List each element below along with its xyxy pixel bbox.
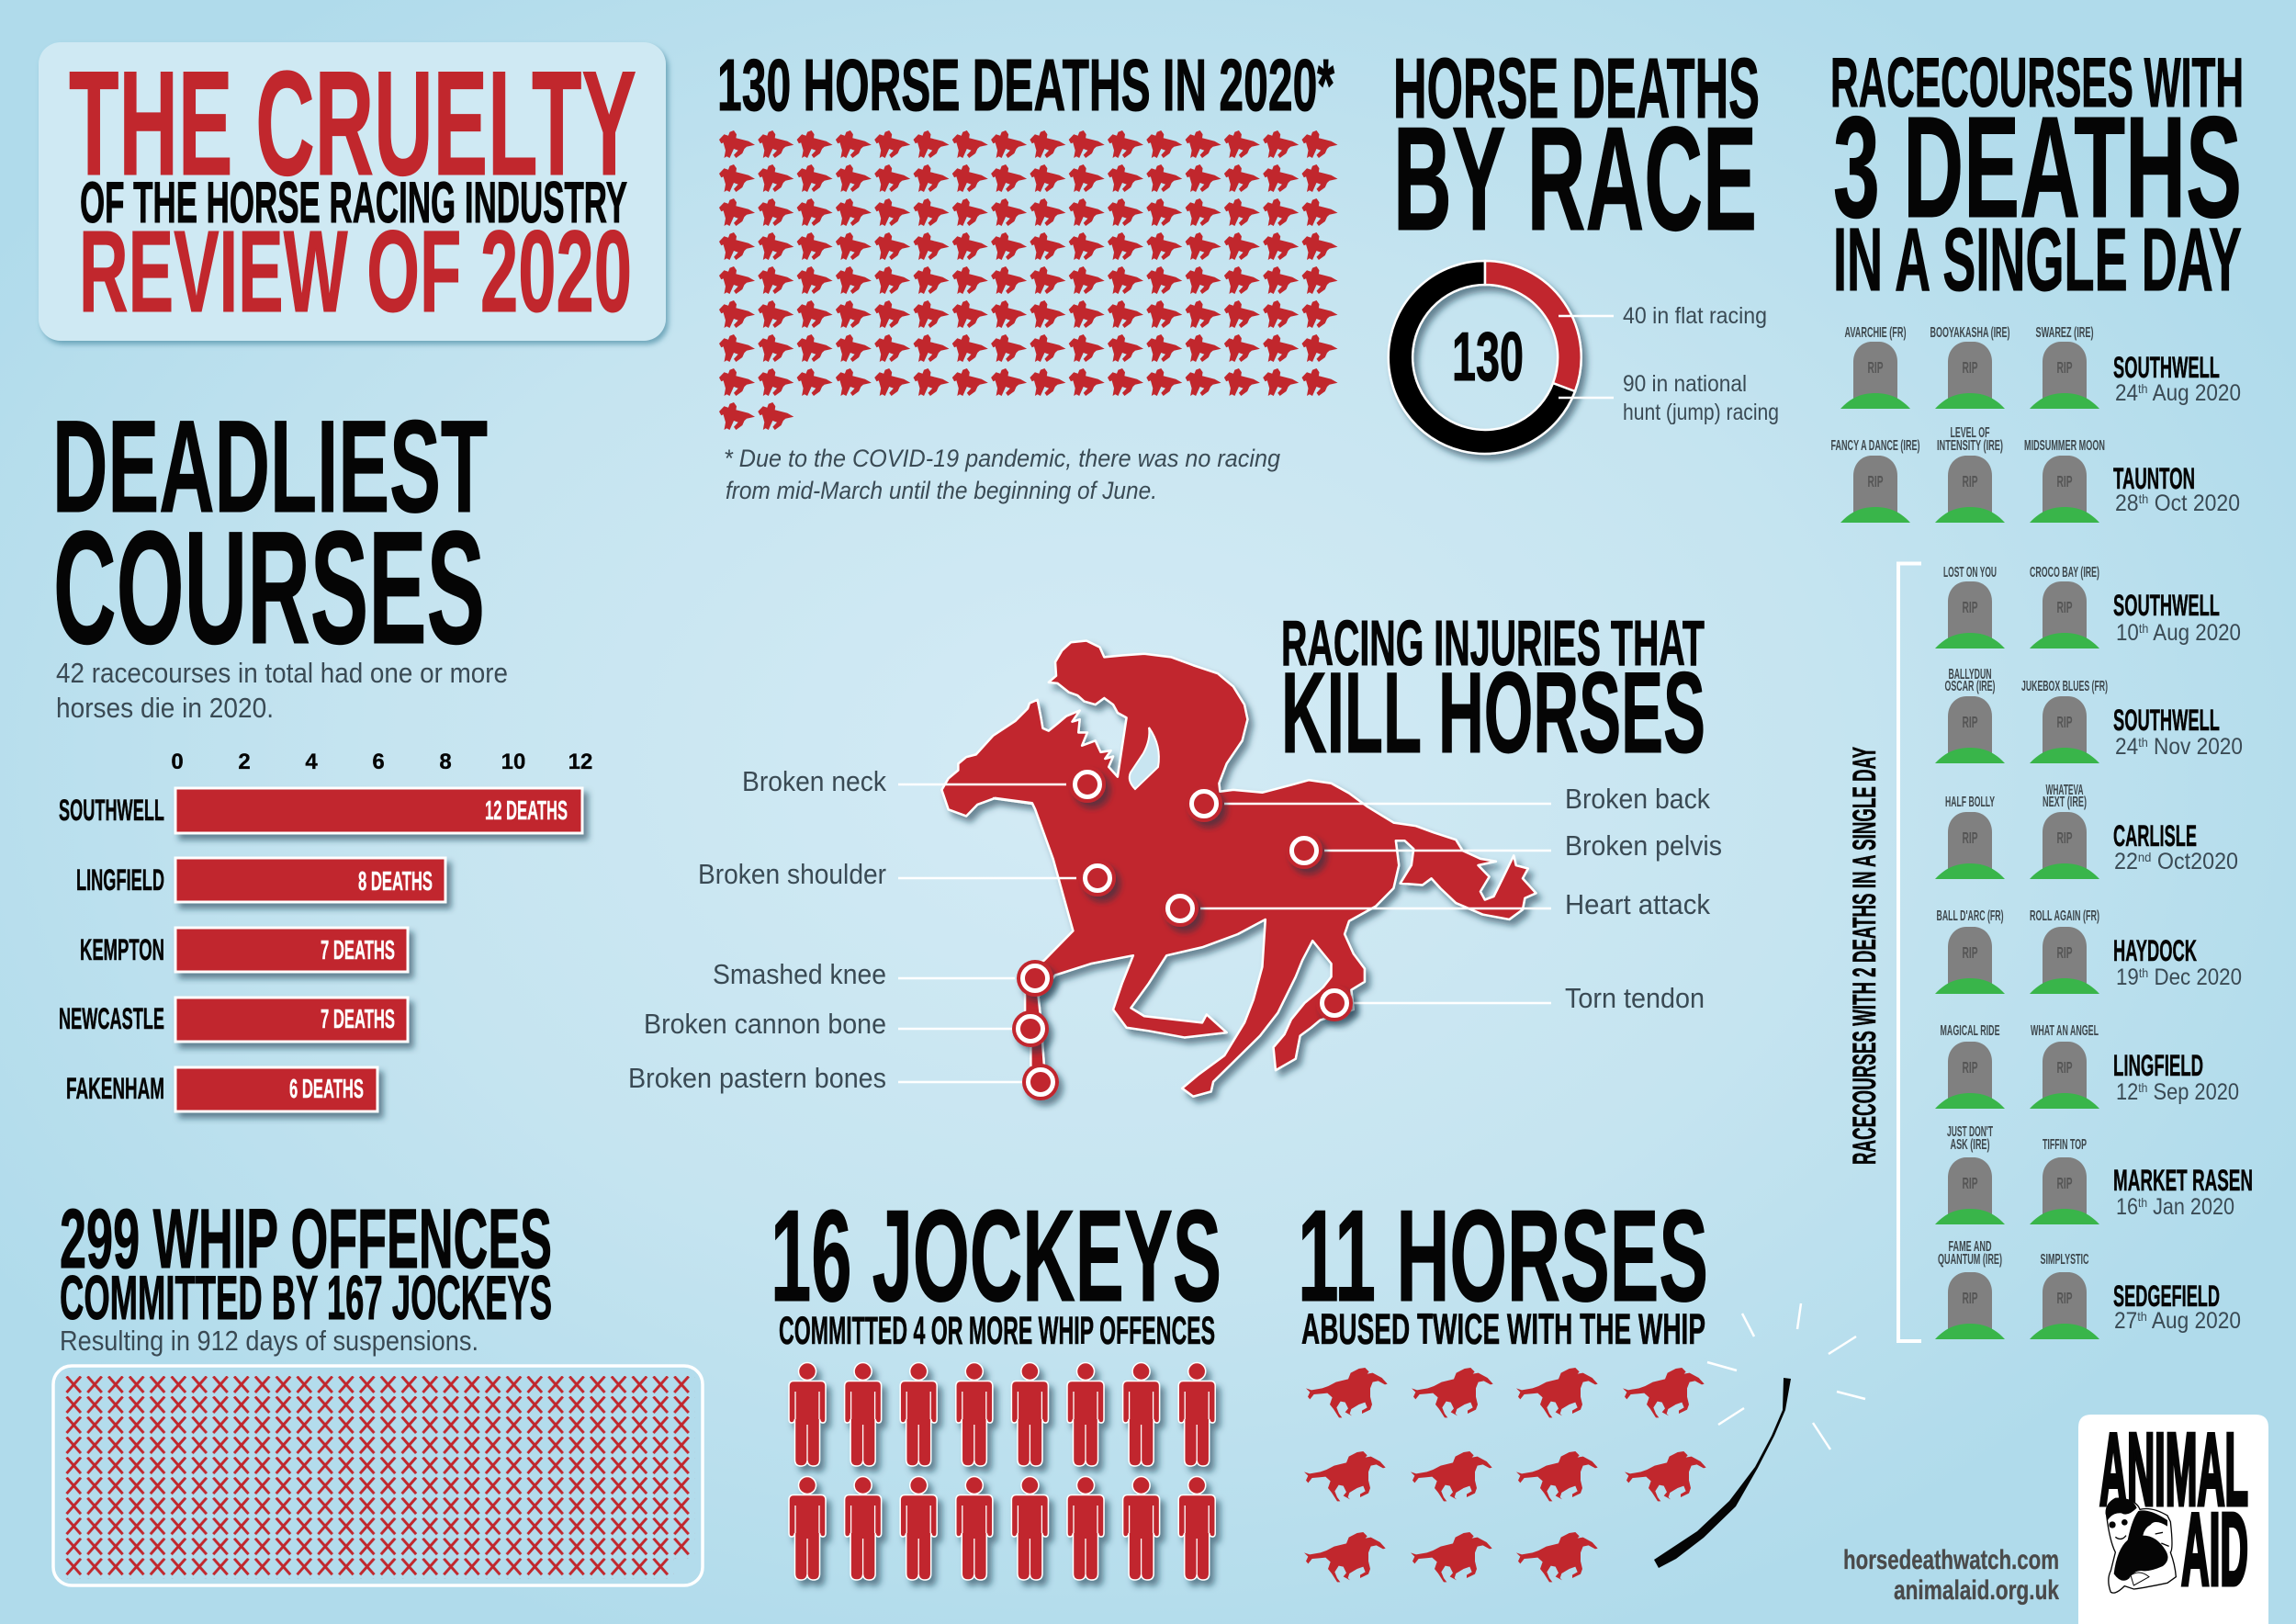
- heading: racecourses with 3 deaths: [1830, 44, 2244, 310]
- bar: Southwell: SOUTHWELL: [59, 794, 164, 827]
- donut chart: [1389, 261, 1779, 454]
- bar: Fakenham: [66, 1067, 377, 1111]
- race: Sedgefield 27 Aug: [1935, 1239, 2241, 1339]
- race: Carlisle 22 Oct: NEXT (IRE): [2043, 795, 2087, 810]
- race: Taunton 28 Oct: TAUNTON: [2113, 462, 2195, 495]
- race: Taunton 28 Oct: FANCY A DANCE (IRE): [1831, 438, 1919, 454]
- race: Haydock 19 Dec: BALL D'ARC (FR): [1936, 908, 2004, 924]
- heading: whip offences: 299 WHIP OFFENCES: [60, 1192, 552, 1286]
- race: Southwell 24 Nov: RIP: [2057, 713, 2073, 731]
- injury labels: Torn tendon: [1565, 982, 1705, 1014]
- injury labels: [628, 765, 1722, 1094]
- rotated label: racecourses with 2 deaths: RACECOURSES WITH 2 DEATHS IN A SINGLE DAY: [1847, 747, 1883, 1165]
- race: Haydock 19 Dec: ROLL AGAIN (FR): [2030, 908, 2099, 924]
- race: Southwell 24 Nov: JUKEBOX BLUES (FR): [2021, 679, 2108, 694]
- race: Carlisle 22 Oct: WHATEVA: [2046, 783, 2083, 798]
- race: Sedgefield 27 Aug: SIMPLYSTIC: [2041, 1252, 2088, 1268]
- race: Lingfield 12 Sep: RIP: [2057, 1058, 2073, 1077]
- heading: horse deaths by race: [1393, 40, 1760, 262]
- heading: 16 jockeys: COMMITTED 4 OR MORE WHIP OFFENCES: [779, 1309, 1215, 1353]
- bar: Newcastle: [59, 998, 408, 1042]
- race: Southwell 10 Aug: RIP: [2057, 598, 2073, 616]
- race: Southwell 24 Aug: Aug 2020: [2148, 380, 2241, 406]
- race: Southwell 24 Aug: RIP: [2057, 358, 2073, 377]
- race: Southwell 10 Aug: Aug 2020: [2148, 620, 2241, 646]
- bar: Lingfield: LINGFIELD: [76, 863, 164, 897]
- title card: REVIEW OF 2020: [79, 207, 632, 336]
- pictogram: 11 horses: [1304, 1368, 1706, 1582]
- injury labels: Broken cannon bone: [644, 1008, 886, 1040]
- bar: Fakenham: 6 DEATHS: [289, 1075, 364, 1104]
- race: Sedgefield 27 Aug: th: [2137, 1309, 2147, 1324]
- race: Carlisle 22 Oct: Oct2020: [2151, 849, 2238, 874]
- injury labels: Broken back: [1565, 783, 1710, 815]
- footnote: from mid-March until the beginning of June.: [726, 477, 1157, 504]
- race: Southwell 10 Aug: LOST ON YOU: [1943, 565, 1997, 581]
- race: Taunton 28 Oct: INTENSITY (IRE): [1937, 438, 2003, 454]
- race: Carlisle 22 Oct: 22: [2114, 849, 2140, 874]
- race: Haydock 19 Dec: RIP: [2057, 943, 2073, 962]
- race: Market Rasen 16 Jan: RIP: [1962, 1174, 1978, 1192]
- axis labels: 0: [171, 750, 184, 774]
- race: Haydock 19 Dec: [1935, 908, 2242, 994]
- race: Carlisle 22 Oct: [1935, 783, 2238, 879]
- race: Lingfield 12 Sep: th: [2138, 1080, 2147, 1095]
- heading: racing injuries: RACING INJURIES THAT: [1281, 607, 1705, 679]
- race: Southwell 24 Aug: RIP: [1868, 358, 1884, 377]
- injury labels: Broken pelvis: [1565, 829, 1722, 862]
- injury labels: Heart attack: [1565, 888, 1710, 920]
- text: racecourses summary: horses die in 2020.: [56, 692, 274, 724]
- race: Southwell 24 Nov: RIP: [1962, 713, 1978, 731]
- race: Southwell 10 Aug: [1935, 565, 2241, 648]
- race: Haydock 19 Dec: th: [2139, 965, 2148, 980]
- bar: Kempton: [80, 928, 408, 972]
- race: Market Rasen 16 Jan: Jan 2020: [2147, 1194, 2234, 1220]
- race: Sedgefield 27 Aug: SEDGEFIELD: [2113, 1280, 2220, 1313]
- heading: 11 horses: [1298, 1183, 1708, 1353]
- axis labels: 8: [439, 750, 452, 774]
- injury labels: Broken pastern bones: [628, 1062, 886, 1094]
- race: Haydock 19 Dec: Dec 2020: [2148, 964, 2242, 990]
- heading: deadliest courses: DEADLIEST: [52, 394, 488, 540]
- race: Market Rasen 16 Jan: ASK (IRE): [1951, 1137, 1989, 1153]
- heading: horse deaths by race: BY RACE: [1393, 96, 1757, 262]
- race: Southwell 10 Aug: 10: [2116, 620, 2142, 646]
- race: Lingfield 12 Sep: 12: [2116, 1079, 2142, 1105]
- race: Sedgefield 27 Aug: 27: [2114, 1308, 2140, 1334]
- race: Sedgefield 27 Aug: RIP: [1962, 1289, 1978, 1307]
- bar: Lingfield: [76, 858, 445, 902]
- race: Haydock 19 Dec: HAYDOCK: [2113, 934, 2197, 967]
- race: Southwell 24 Nov: [1935, 667, 2243, 763]
- race: Southwell 24 Nov: Nov 2020: [2148, 734, 2243, 760]
- race: Southwell 24 Aug: [1840, 325, 2241, 409]
- bar: Southwell: [59, 788, 582, 833]
- text: racecourses summary: [56, 657, 508, 724]
- race: Southwell 24 Nov: 24: [2115, 734, 2141, 760]
- heading: horse deaths by race: HORSE DEATHS: [1393, 40, 1760, 136]
- race: Haydock 19 Dec: RIP: [1962, 943, 1978, 962]
- heading: 11 horses: 11 HORSES: [1298, 1183, 1708, 1329]
- bar chart: deadliest courses: [59, 750, 592, 1111]
- injury markers: [1012, 766, 1353, 1100]
- race: Taunton 28 Oct: LEVEL OF: [1951, 425, 1989, 441]
- heading: whip offences: [60, 1192, 552, 1357]
- race: Southwell 24 Aug: RIP: [1962, 358, 1978, 377]
- bracket: two deaths section: [1898, 564, 1921, 1341]
- title card: OF THE HORSE RACING INDUSTRY: [80, 171, 627, 235]
- footnote: [724, 445, 1280, 504]
- heading: whip offences: Resulting in 912 days of suspensions.: [60, 1325, 478, 1357]
- website links: animalaid.org.uk: [1894, 1575, 2059, 1606]
- donut chart: 130: [1452, 318, 1524, 395]
- text: racecourses summary: 42 racecourses in total had one or more: [56, 657, 508, 689]
- axis labels: [171, 750, 592, 774]
- race: Taunton 28 Oct: Oct 2020: [2148, 491, 2240, 516]
- race: Southwell 10 Aug: th: [2139, 621, 2148, 636]
- donut chart: hunt (jump) racing: [1623, 400, 1779, 425]
- injury labels: Smashed knee: [713, 958, 886, 990]
- title card: THE CRUELTY: [69, 40, 636, 207]
- icon: whip: [1654, 1303, 1865, 1568]
- race: Southwell 24 Aug: 24: [2115, 380, 2141, 406]
- bar: Newcastle: 7 DEATHS: [321, 1005, 395, 1034]
- axis labels: 6: [372, 750, 385, 774]
- heading: deadliest courses: [52, 394, 488, 678]
- website links: horsedeathwatch.com: [1843, 1545, 2059, 1575]
- race: Taunton 28 Oct: th: [2139, 491, 2148, 506]
- bar: Newcastle: NEWCASTLE: [59, 1002, 164, 1035]
- race: Southwell 24 Nov: OSCAR (IRE): [1945, 679, 1995, 694]
- heading: whip offences: COMMITTED BY 167 JOCKEYS: [60, 1263, 552, 1333]
- race: Taunton 28 Oct: RIP: [1868, 472, 1884, 491]
- bar: Kempton: 7 DEATHS: [321, 936, 395, 965]
- race: Taunton 28 Oct: RIP: [2057, 472, 2073, 491]
- race: Southwell 24 Aug: th: [2138, 381, 2148, 396]
- title card: [39, 40, 666, 341]
- race: Sedgefield 27 Aug: Aug 2020: [2147, 1308, 2241, 1334]
- heading: racing injuries: KILL HORSES: [1281, 649, 1705, 777]
- race: Market Rasen 16 Jan: th: [2138, 1195, 2147, 1210]
- race: Market Rasen 16 Jan: TIFFIN TOP: [2043, 1137, 2087, 1153]
- bar: Fakenham: FAKENHAM: [66, 1072, 164, 1105]
- heading: deadliest courses: COURSES: [53, 499, 485, 678]
- logo: Animal Aid: [2078, 1413, 2268, 1624]
- injury leader lines: [898, 784, 1551, 1082]
- race: Southwell 24 Aug: SOUTHWELL: [2113, 351, 2220, 384]
- race: Southwell 24 Aug: SWAREZ (IRE): [2035, 325, 2094, 341]
- race: Carlisle 22 Oct: RIP: [2057, 829, 2073, 847]
- heading: 16 jockeys: [771, 1183, 1221, 1353]
- pictogram: 299 crosses: [53, 1366, 703, 1585]
- pictogram: 130 horses: [719, 130, 1337, 430]
- race: Taunton 28 Oct: MIDSUMMER MOON: [2024, 438, 2105, 454]
- race: Lingfield 12 Sep: WHAT AN ANGEL: [2031, 1023, 2099, 1039]
- race: Sedgefield 27 Aug: QUANTUM (IRE): [1938, 1252, 2002, 1268]
- pictogram: 16 jockeys: [789, 1363, 1215, 1580]
- heading: racing injuries: [1281, 607, 1705, 777]
- donut chart: 90 in national: [1623, 371, 1747, 397]
- bar: Kempton: KEMPTON: [80, 933, 164, 966]
- horse and jockey silhouette: [941, 640, 1536, 1097]
- axis labels: 10: [501, 750, 525, 774]
- race: Market Rasen 16 Jan: 16: [2116, 1194, 2142, 1220]
- race: Taunton 28 Oct: [1831, 425, 2240, 523]
- race: Southwell 24 Nov: BALLYDUN: [1949, 667, 1991, 682]
- injury labels: Broken neck: [742, 765, 886, 797]
- race: Taunton 28 Oct: 28: [2115, 491, 2141, 516]
- heading: 11 horses: ABUSED TWICE WITH THE WHIP: [1301, 1304, 1705, 1353]
- donut chart: 40 in flat racing: [1623, 303, 1767, 329]
- race: Market Rasen 16 Jan: [1935, 1124, 2253, 1224]
- bar: Southwell: 12 DEATHS: [485, 796, 568, 826]
- race: Market Rasen 16 Jan: JUST DON'T: [1947, 1124, 1993, 1140]
- race: Lingfield 12 Sep: LINGFIELD: [2113, 1049, 2203, 1082]
- race: Southwell 24 Aug: BOOYAKASHA (IRE): [1930, 325, 2009, 341]
- icon: monkeys: [2106, 1498, 2176, 1593]
- heading: 130 horse deaths: 130 HORSE DEATHS IN 2020*: [717, 44, 1335, 126]
- race: Haydock 19 Dec: 19: [2116, 964, 2142, 990]
- race: Lingfield 12 Sep: [1935, 1023, 2239, 1109]
- race: Southwell 24 Aug: AVARCHIE (FR): [1844, 325, 1907, 341]
- bar: Lingfield: 8 DEATHS: [358, 867, 433, 897]
- race: Sedgefield 27 Aug: FAME AND: [1949, 1239, 1991, 1255]
- race: Taunton 28 Oct: RIP: [1962, 472, 1978, 491]
- race: Lingfield 12 Sep: Sep 2020: [2147, 1079, 2239, 1105]
- injury labels: Broken shoulder: [698, 858, 886, 890]
- heading: 16 jockeys: 16 JOCKEYS: [771, 1183, 1221, 1329]
- axis labels: 4: [305, 750, 318, 774]
- footnote: * Due to the COVID-19 pandemic, there was no racing: [724, 445, 1280, 472]
- axis labels: 12: [568, 750, 592, 774]
- race: Market Rasen 16 Jan: RIP: [2057, 1174, 2073, 1192]
- race: Carlisle 22 Oct: CARLISLE: [2113, 819, 2197, 852]
- website links: [1843, 1545, 2059, 1606]
- race: Sedgefield 27 Aug: RIP: [2057, 1289, 2073, 1307]
- race: Southwell 10 Aug: CROCO BAY (IRE): [2030, 565, 2099, 581]
- race: Carlisle 22 Oct: nd: [2138, 850, 2151, 864]
- race: Carlisle 22 Oct: RIP: [1962, 829, 1978, 847]
- race: Southwell 10 Aug: RIP: [1962, 598, 1978, 616]
- race: Carlisle 22 Oct: HALF BOLLY: [1945, 795, 1995, 810]
- race: Southwell 24 Nov: th: [2138, 735, 2148, 750]
- race: Lingfield 12 Sep: RIP: [1962, 1058, 1978, 1077]
- race: Southwell 24 Nov: SOUTHWELL: [2113, 704, 2220, 737]
- race: Southwell 10 Aug: SOUTHWELL: [2113, 589, 2220, 622]
- race: Lingfield 12 Sep: MAGICAL RIDE: [1940, 1023, 2000, 1039]
- axis labels: 2: [238, 750, 251, 774]
